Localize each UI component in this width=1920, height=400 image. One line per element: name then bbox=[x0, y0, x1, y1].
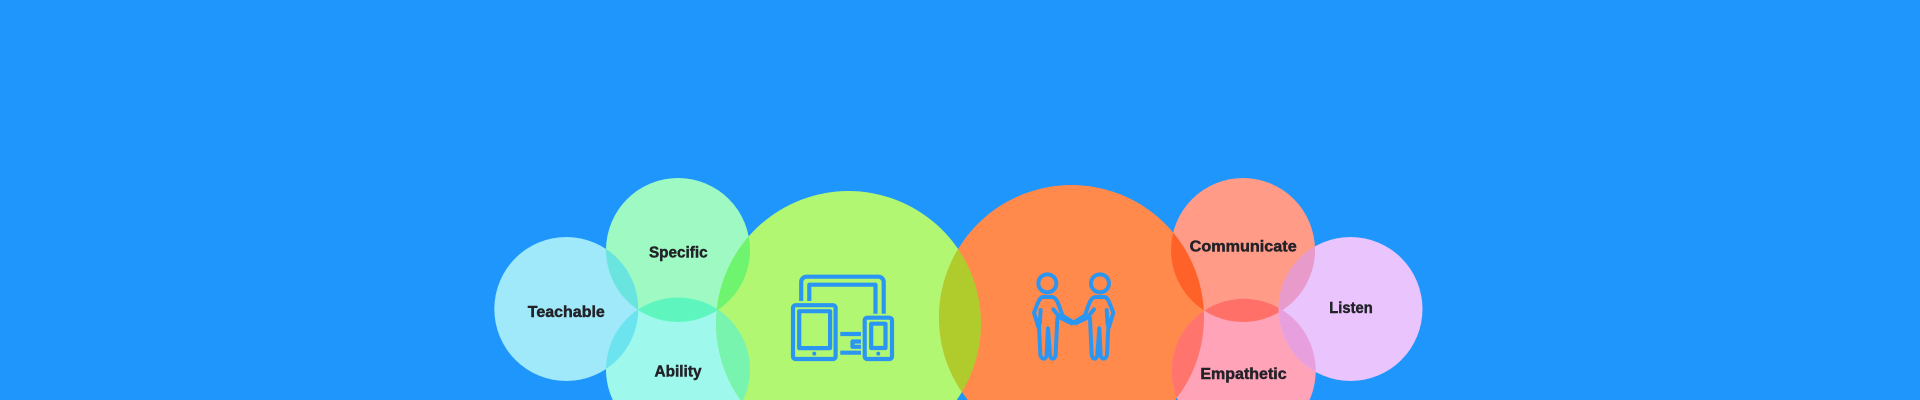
label: Listen: Listen bbox=[1329, 300, 1373, 317]
circle: Ability: Ability bbox=[654, 364, 702, 381]
circle: Empathetic bbox=[1172, 299, 1316, 400]
icon: devices bbox=[793, 277, 892, 359]
label: Empathetic: Empathetic bbox=[1200, 366, 1287, 383]
circle: people orange bbox=[939, 185, 1204, 400]
icon: two people shaking hands bbox=[1034, 274, 1113, 359]
circle: Listen bbox=[1278, 237, 1422, 381]
right person bbox=[1074, 274, 1113, 359]
infographic canvas bbox=[494, 178, 1422, 400]
label: Communicate: Communicate bbox=[1190, 239, 1297, 256]
circle: devices green bbox=[716, 191, 981, 400]
circle: Communicate bbox=[1171, 178, 1315, 322]
left person bbox=[1034, 274, 1073, 359]
circle: Teachable: Teachable bbox=[528, 304, 605, 321]
circle: Specific: Specific bbox=[649, 245, 708, 262]
overlaps between circles bbox=[606, 232, 1316, 400]
circle: Ability bbox=[606, 297, 750, 400]
circle: Specific bbox=[606, 178, 750, 322]
circle: Teachable bbox=[494, 237, 638, 381]
